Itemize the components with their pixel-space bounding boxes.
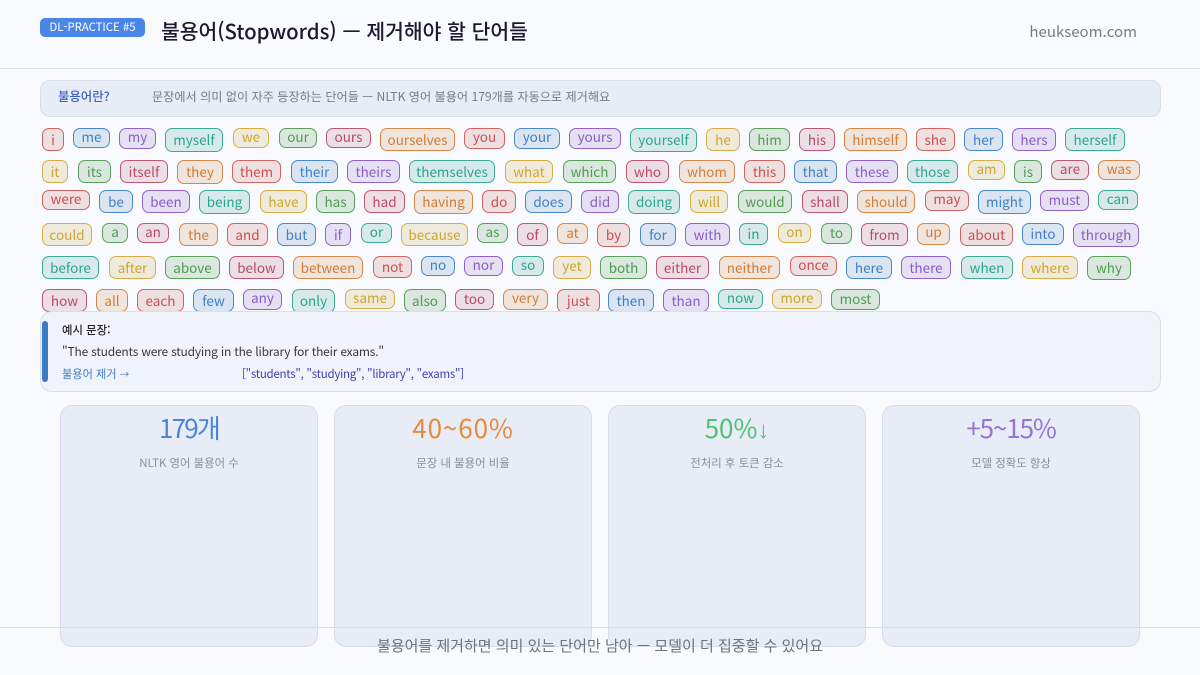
chip row 1: him — [757, 129, 782, 149]
chip row 3: might — [986, 191, 1023, 211]
panel: definition — [40, 80, 1161, 117]
chip row 3: did — [590, 191, 610, 211]
site name: heukseom.com — [1029, 21, 1137, 42]
chip row 3: does — [533, 191, 564, 211]
chip row 6 — [42, 287, 880, 312]
chip row 1: me — [82, 126, 101, 146]
result tokens: ["students", "studying", "library", "exams"] — [242, 366, 464, 382]
example label: 예시 문장: — [62, 322, 111, 338]
chip row 6: any — [251, 287, 274, 307]
chip row 1: yours — [578, 126, 612, 146]
stat value: 50%↓ — [705, 409, 769, 446]
chip row 3: had — [372, 191, 397, 211]
definition text: 문장에서 의미 없이 자주 등장하는 단어들 — NLTK 영어 불용어 179개를 자동으로 제거해요 — [152, 88, 610, 105]
stat card: 50%↓ — [608, 405, 866, 647]
chip row 2: what — [513, 161, 545, 181]
chip row 3: were — [51, 188, 81, 208]
chip row 2: themselves — [416, 161, 488, 181]
chip row 1: herself — [1074, 129, 1116, 149]
chip row 6: all — [104, 290, 120, 310]
chip row 2: whom — [687, 161, 727, 181]
chip row 1: ourselves — [388, 129, 447, 149]
example sentence: "The students were studying in the library for their exams." — [62, 343, 384, 360]
footer message: 불용어를 제거하면 의미 있는 단어만 남아 — 모델이 더 집중할 수 있어요 — [377, 635, 823, 656]
stat label: 문장 내 불용어 비율 — [416, 455, 510, 471]
chip row 3: be — [108, 191, 124, 211]
chip row 1: ours — [335, 126, 362, 146]
chip row 2: it — [51, 161, 59, 181]
chip row 4: because — [408, 224, 461, 244]
chip row 4: through — [1081, 224, 1131, 244]
stat label: 전처리 후 토큰 감소 — [690, 455, 784, 471]
chip row 4: to — [830, 222, 843, 242]
chip row 5: why — [1096, 257, 1122, 277]
chip row 5: after — [118, 257, 147, 277]
chip row 3: being — [207, 191, 242, 211]
chip row 3: doing — [636, 191, 672, 211]
chip row 2: its — [87, 161, 102, 181]
chip row 2: that — [803, 161, 828, 181]
chip row 6: also — [412, 290, 438, 310]
chip row 5 — [42, 254, 1131, 280]
stat card: 40~60% — [334, 405, 592, 647]
chip row 4: with — [694, 224, 721, 244]
chip row 3: having — [422, 191, 465, 211]
chip row 5: once — [798, 254, 829, 274]
chip row 2: which — [571, 161, 608, 181]
stat label: NLTK 영어 불용어 수 — [139, 455, 239, 471]
chip row 4: into — [1030, 223, 1056, 243]
chip row 2: they — [186, 161, 214, 181]
chip row 4: up — [925, 221, 942, 241]
stopword chip cloud — [42, 126, 1140, 312]
chip row 3: shall — [810, 191, 840, 211]
chip row 6: only — [300, 290, 327, 310]
chip row 5: below — [237, 257, 276, 277]
chip row 3: would — [745, 191, 785, 211]
chip row 3: do — [491, 191, 507, 211]
chip row 5: either — [664, 257, 701, 277]
chip row 5: above — [173, 257, 212, 277]
chip row 4: at — [566, 222, 579, 242]
stat value: 40~60% — [412, 409, 514, 446]
chip row 5: yet — [562, 255, 582, 275]
chip row 1 — [42, 126, 1125, 152]
chip row 6: just — [567, 290, 590, 310]
chip row 1: he — [715, 129, 731, 149]
chip row 1: your — [523, 126, 551, 146]
header divider — [0, 68, 1200, 69]
chip row 5: between — [301, 257, 355, 277]
badge: DL-PRACTICE #5 — [40, 18, 145, 37]
chip row 4: as — [486, 221, 499, 241]
chip row 5: not — [382, 256, 403, 276]
chip row 4: a — [111, 221, 119, 241]
chip row 4: but — [286, 224, 307, 244]
chip row 6: too — [464, 288, 485, 308]
chip row 6: how — [51, 290, 78, 310]
chip row 4 — [42, 221, 1139, 247]
chip row 2 — [42, 158, 1140, 184]
chip row 3: have — [268, 191, 299, 211]
chip row 5: so — [521, 254, 535, 274]
chip row 2: who — [634, 161, 661, 181]
chip row 3: has — [324, 191, 347, 211]
chip row 5: before — [50, 257, 91, 277]
chip row 6: few — [202, 290, 225, 310]
chip row 2: is — [1023, 161, 1033, 181]
chip row 4: in — [748, 223, 759, 243]
accent bar — [42, 321, 48, 382]
chip row 3: may — [933, 188, 961, 208]
definition label: 불용어란? — [58, 87, 110, 105]
chip row 6: most — [840, 288, 871, 308]
chip row 1: my — [128, 126, 147, 146]
chip row 4: an — [145, 221, 161, 241]
chip row 3: should — [864, 191, 908, 211]
chip row 6: each — [146, 290, 175, 310]
chip row 1: hers — [1020, 129, 1048, 149]
removal label: 불용어 제거 → — [62, 366, 129, 382]
chip row 5: there — [909, 257, 943, 277]
stat value: 179개 — [159, 409, 219, 446]
chip row 4: from — [869, 224, 900, 244]
chip row 3: been — [150, 191, 182, 211]
chip row 5: when — [970, 257, 1004, 277]
chip row 3: can — [1107, 188, 1129, 208]
panel: example sentence — [40, 311, 1161, 392]
chip row 2: these — [855, 161, 889, 181]
badge: DL-PRACTICE #5: DL-PRACTICE #5 — [49, 19, 136, 35]
chip row 2: itself — [129, 161, 159, 181]
chip row 4: for — [649, 224, 667, 244]
chip row 2: am — [976, 158, 997, 178]
chip row 1: our — [287, 126, 309, 146]
chip row 3: will — [698, 191, 720, 211]
chip row 1: she — [924, 129, 946, 149]
chip row 4: by — [606, 224, 621, 244]
chip row 6: same — [353, 287, 387, 307]
chip row 2: them — [240, 161, 273, 181]
chip row 3 — [42, 188, 1138, 214]
stat label: 모델 정확도 향상 — [971, 455, 1051, 471]
chip row 5: here — [855, 257, 883, 277]
chip row 1: yourself — [638, 129, 689, 149]
chip row 5: no — [430, 254, 446, 274]
chip row 4: on — [786, 221, 803, 241]
chip row 1: her — [973, 129, 994, 149]
chip row 2: this — [753, 161, 776, 181]
chip row 1: himself — [852, 129, 899, 149]
chip row 3: must — [1049, 189, 1080, 209]
chip row 5: where — [1030, 257, 1070, 277]
chip row 4: the — [188, 224, 209, 244]
chip row 6: than — [671, 290, 701, 310]
chip row 2: was — [1107, 158, 1131, 178]
chip row 4: of — [526, 224, 539, 244]
stat value: +5~15% — [966, 409, 1056, 446]
chip row 2: are — [1060, 158, 1080, 178]
stat card: +5~15% — [882, 405, 1140, 647]
chip row 2: those — [915, 161, 950, 181]
stat card: 179개 — [60, 405, 318, 647]
chip row 1: myself — [173, 129, 215, 149]
chip row 4: and — [235, 224, 260, 244]
chip row 5: neither — [727, 257, 772, 277]
chip row 1: we — [242, 126, 260, 146]
chip row 1: i — [51, 129, 55, 149]
footer divider — [0, 627, 1200, 628]
chip row 1: his — [808, 129, 826, 149]
chip row 4: or — [370, 221, 383, 241]
chip row 6: then — [616, 290, 646, 310]
chip row 4: if — [334, 224, 342, 244]
chip row 6: now — [727, 287, 754, 307]
chip row 4: about — [968, 224, 1005, 244]
chip row 2: theirs — [356, 161, 391, 181]
chip row 5: nor — [473, 254, 494, 274]
chip row 5: both — [609, 257, 638, 277]
chip row 1: you — [473, 126, 496, 146]
chip row 2: their — [300, 161, 329, 181]
chip row 4: could — [49, 224, 85, 244]
chip row 6: very — [512, 287, 539, 307]
chip row 6: more — [780, 287, 814, 307]
title: 불용어(Stopwords) — 제거해야 할 단어들 — [161, 15, 528, 45]
